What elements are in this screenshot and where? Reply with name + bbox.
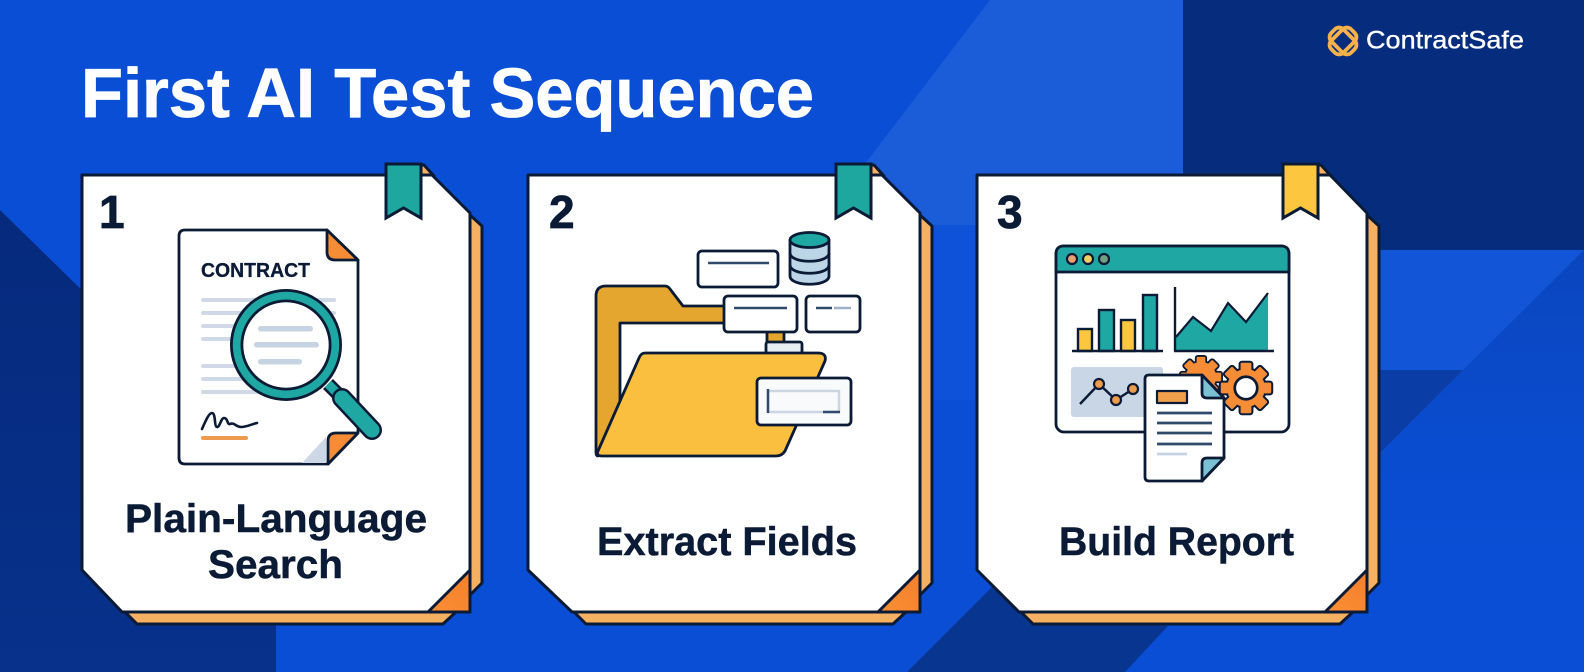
label: Build Report xyxy=(1059,520,1294,564)
field box xyxy=(724,296,797,332)
browser window xyxy=(1056,246,1289,432)
step number: 3 xyxy=(997,186,1023,238)
corner fold xyxy=(1325,570,1367,612)
bookmark xyxy=(1283,164,1318,218)
back page xyxy=(1021,165,1379,624)
logo: ContractSafe xyxy=(1327,25,1524,57)
icon: database xyxy=(790,232,829,284)
icon: folder with extracted fields xyxy=(596,232,860,456)
corner fold xyxy=(878,570,920,612)
bar chart xyxy=(1072,295,1163,351)
step number: 1 xyxy=(99,186,125,238)
area chart xyxy=(1174,287,1274,351)
panel: step 3 Build Report xyxy=(977,164,1379,624)
icon: contract under magnifying glass xyxy=(179,230,372,464)
line chart panel xyxy=(1071,367,1163,417)
logo wordmark: ContractSafe xyxy=(1366,26,1524,54)
icon: small gear xyxy=(1181,357,1221,397)
label: Plain-Language xyxy=(125,497,427,541)
icon: large gear xyxy=(1221,363,1271,413)
card face xyxy=(977,175,1367,612)
icon: dashboard window with report xyxy=(1056,246,1289,481)
card face xyxy=(82,175,470,612)
panel: step 2 Extract Fields xyxy=(528,164,932,624)
bookmark xyxy=(386,164,421,218)
step number: 2 xyxy=(549,186,575,238)
icon: contract under magnifying glass: CONTRACT xyxy=(201,260,310,282)
label line 2: Search xyxy=(208,543,343,587)
bookmark xyxy=(836,164,871,218)
corner fold xyxy=(428,570,470,612)
field box xyxy=(757,378,851,425)
icon: report document xyxy=(1145,375,1224,481)
icon: logo mark xyxy=(1327,25,1359,57)
field box xyxy=(806,296,860,332)
panel: step 1 Plain-Language Search xyxy=(82,164,482,624)
card face xyxy=(528,175,920,612)
back page xyxy=(574,165,932,624)
title: First AI Test Sequence xyxy=(81,54,814,132)
back page xyxy=(125,165,482,624)
label: Extract Fields xyxy=(597,520,857,564)
field box xyxy=(698,251,778,287)
